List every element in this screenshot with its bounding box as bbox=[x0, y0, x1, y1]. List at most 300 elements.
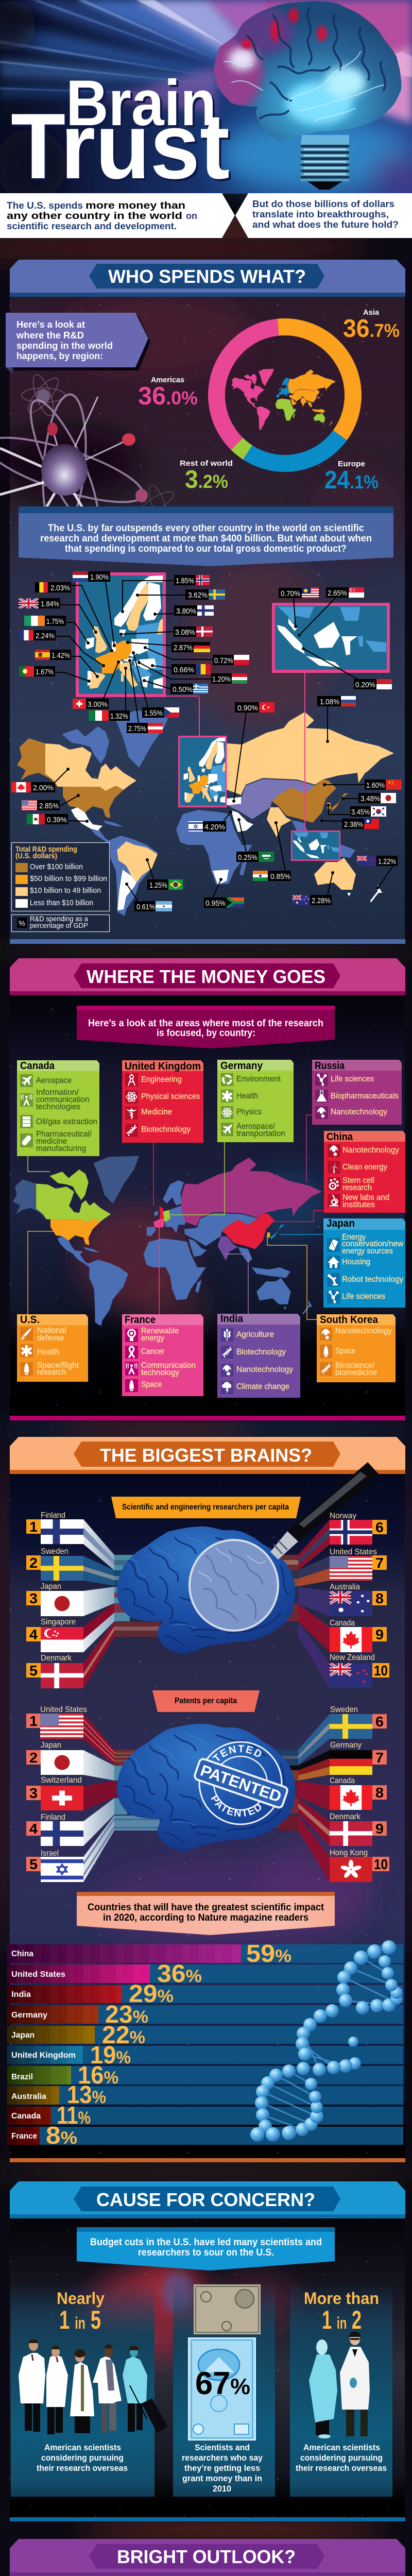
inset: Southeast Asia map bbox=[273, 604, 388, 671]
label: United Kingdom bbox=[19, 598, 60, 608]
section header: cause for concern: CAUSE FOR CONCERN? bbox=[96, 2189, 315, 2210]
card: South Korea: Nanotechnology bbox=[335, 1327, 392, 1335]
label: New Zealand: 1.22% bbox=[378, 857, 396, 866]
rank 10: New Zealand: New Zealand bbox=[330, 1653, 375, 1662]
card: France: energy bbox=[141, 1334, 164, 1343]
label: Japan: 3.48% bbox=[360, 794, 380, 803]
rank 1: United States: 1 bbox=[29, 1713, 38, 1729]
callout: budget cuts: Budget cuts in the U.S. have led many scientists and bbox=[90, 2237, 322, 2248]
rank 3: Japan: Japan bbox=[41, 1582, 61, 1591]
legend: total R&D spending: (U.S. dollars) bbox=[15, 852, 57, 860]
stat column: more than 1 in 2 bbox=[290, 2282, 392, 2497]
legend: total R&D spending: $50 billion to $99 billion bbox=[30, 874, 107, 883]
stat column: nearly 1 in 5: their research overseas bbox=[37, 2463, 128, 2473]
callout: research focus: Here’s a look at the areas where most of the research bbox=[88, 1018, 323, 1029]
callout: research focus: is focused, by country: bbox=[157, 1028, 255, 1039]
card: France: Cancer bbox=[141, 1347, 165, 1356]
card: France: Space bbox=[141, 1380, 162, 1389]
bar: India: 29% bbox=[129, 1980, 174, 2008]
stat column: 67 percent: researchers who say bbox=[182, 2453, 263, 2463]
card: United Kingdom bbox=[122, 1060, 203, 1143]
label: Turkey bbox=[235, 702, 274, 713]
illustration: brain with magnifier bbox=[117, 1462, 380, 1654]
label: patents per capita bbox=[152, 1690, 260, 1712]
bar: France: France bbox=[11, 2132, 37, 2141]
callout: R&D by region: happens, by region: bbox=[16, 351, 103, 361]
legend: total R&D spending: Less than $10 billion bbox=[30, 899, 93, 907]
label: Malaysia: 0.70% bbox=[281, 589, 300, 598]
illustration: DNA helix bbox=[250, 1940, 403, 2142]
rank flags: patents per capita bbox=[26, 1705, 389, 1882]
card: Japan bbox=[323, 1218, 405, 1308]
bar: Japan bbox=[7, 2022, 145, 2049]
rank 3: Switzerland bbox=[26, 1776, 83, 1810]
illustration: brain with patent stamp bbox=[116, 1724, 296, 1851]
card: China: Nanotechnology bbox=[342, 1146, 399, 1155]
bar: Australia bbox=[7, 2081, 106, 2109]
label: Brazil bbox=[147, 879, 183, 890]
rank 1: United States: United States bbox=[40, 1705, 87, 1714]
label: Ireland bbox=[24, 616, 66, 626]
stat column: nearly 1 in 5: considering pursuing bbox=[41, 2453, 124, 2463]
world map: research focus by country bbox=[13, 1156, 322, 1326]
small inset: Southeast Asia on world map bbox=[291, 831, 340, 860]
callout: scientific impact 2020: Countries that will have the greatest scientific impact bbox=[88, 1902, 324, 1913]
rank 9: Denmark: 9 bbox=[375, 1821, 384, 1837]
callout: U.S. outspends bbox=[19, 506, 393, 566]
rank 8: Canada bbox=[330, 1776, 387, 1810]
label: China bbox=[365, 779, 402, 790]
label: Israel: 4.20% bbox=[204, 823, 225, 832]
panel: where the money goes bbox=[10, 995, 405, 1416]
label: Australia bbox=[293, 895, 332, 905]
card: India: India bbox=[220, 1313, 244, 1325]
rank 6: Norway: 6 bbox=[375, 1519, 384, 1535]
rank 5: Israel: 5 bbox=[29, 1856, 38, 1872]
section header: cause for concern bbox=[10, 2181, 405, 2218]
rank 7: Germany: 7 bbox=[375, 1750, 384, 1766]
card: South Korea: Space bbox=[335, 1347, 355, 1355]
rank 3: Switzerland: Switzerland bbox=[41, 1776, 82, 1785]
card: Japan: Life sciences bbox=[342, 1292, 385, 1301]
legend: percent of GDP: % bbox=[19, 919, 25, 928]
label: South Africa: 0.95% bbox=[205, 899, 226, 908]
label: Italy bbox=[89, 710, 130, 721]
nebula strip under hero bbox=[222, 215, 248, 238]
rank 9: Canada: Canada bbox=[330, 1619, 355, 1628]
world map in donut bbox=[231, 369, 336, 430]
label: Russia: 1.08% bbox=[320, 698, 339, 706]
section header: where the money goes: WHERE THE MONEY GOES bbox=[87, 966, 325, 987]
bar: India bbox=[7, 1980, 174, 2008]
section header: bright outlook: BRIGHT OUTLOOK? bbox=[117, 2546, 296, 2567]
card: France bbox=[122, 1314, 203, 1396]
rank 10: New Zealand: 10 bbox=[374, 1663, 388, 1679]
card: South Korea: South Korea bbox=[320, 1314, 379, 1326]
callout: budget cuts bbox=[77, 2227, 335, 2270]
label: Argentina bbox=[134, 901, 172, 911]
label: Singapore bbox=[326, 587, 364, 598]
card: South Korea: biomedicine bbox=[335, 1368, 377, 1377]
label: Europe: 24.1% bbox=[324, 466, 379, 494]
rank 7: United States: United States bbox=[330, 1548, 377, 1556]
ribbons: patents left bbox=[83, 1714, 160, 1882]
label: Brazil: 1.25% bbox=[149, 881, 167, 890]
label: Rest of world: 3.2% bbox=[185, 466, 228, 494]
label: Finland bbox=[174, 605, 214, 616]
stat column: more than 1 in 2: considering pursuing bbox=[300, 2453, 383, 2463]
card: United Kingdom: United Kingdom bbox=[125, 1061, 201, 1072]
intro banner left: any other country in the world bbox=[7, 211, 182, 222]
stat column: nearly 1 in 5 bbox=[11, 2282, 167, 2497]
section header: where the money goes bbox=[10, 958, 405, 995]
bar: France: 8% bbox=[46, 2122, 77, 2149]
bar: United States: 36% bbox=[157, 1960, 202, 1988]
label: Israel bbox=[188, 821, 226, 832]
label: Belgium bbox=[35, 582, 71, 592]
label: South Africa bbox=[204, 897, 244, 908]
illustration: two scientists bbox=[309, 2332, 370, 2438]
bar: United Kingdom: United Kingdom bbox=[11, 2051, 76, 2060]
label: New Zealand bbox=[357, 856, 398, 866]
label: Russia bbox=[317, 696, 356, 706]
label: Turkey: 0.90% bbox=[237, 704, 258, 713]
label: Sweden: 3.62% bbox=[188, 591, 208, 600]
card: Japan: Housing bbox=[342, 1258, 370, 1266]
label: Finland: 3.80% bbox=[176, 607, 196, 616]
card: Japan: energy sources bbox=[342, 1247, 393, 1256]
intro banner left: scientific research and development. bbox=[7, 221, 177, 231]
rank 9: Denmark: Denmark bbox=[330, 1812, 361, 1821]
label: Portugal bbox=[19, 666, 55, 676]
stat column: 67 percent: Scientists and bbox=[195, 2443, 250, 2452]
panel: cause for concern bbox=[10, 2218, 405, 2517]
ribbons: researchers right bbox=[273, 1520, 330, 1688]
card: Russia: Nanotechnology bbox=[331, 1108, 387, 1116]
label: Hungary: 1.20% bbox=[212, 675, 231, 684]
callout: U.S. outspends: that spending is compared to our total gross domestic product? bbox=[65, 544, 347, 554]
card: Germany: Health bbox=[236, 1092, 258, 1100]
card: United Kingdom: Engineering bbox=[141, 1075, 182, 1084]
world map: R&D spending bbox=[17, 673, 394, 916]
stat column: 67 percent bbox=[173, 2282, 275, 2497]
bar: Brazil: Brazil bbox=[11, 2073, 33, 2081]
callout: research focus bbox=[77, 1006, 335, 1048]
intro banner left: The U.S. spends bbox=[7, 200, 83, 211]
label: Australia: 2.28% bbox=[312, 896, 331, 905]
label: South Korea bbox=[350, 806, 386, 817]
card: South Korea bbox=[317, 1314, 396, 1382]
bar: Australia: 13% bbox=[67, 2081, 106, 2109]
rank 6: Sweden bbox=[330, 1705, 387, 1739]
card: India: Agriculture bbox=[236, 1330, 274, 1339]
card: Russia: Life sciences bbox=[331, 1075, 374, 1083]
callout: R&D by region: spending in the world bbox=[16, 341, 113, 351]
intro banner right: But do those billions of dollars bbox=[252, 199, 394, 209]
icon: dollar bill front: 67% bbox=[195, 2366, 250, 2401]
card: Russia: Biopharmaceuticals bbox=[331, 1092, 399, 1100]
bar: Germany: Germany bbox=[11, 2011, 47, 2020]
rank 4: Singapore: 4 bbox=[29, 1626, 38, 1642]
label: Canada bbox=[11, 782, 55, 792]
stat column: nearly 1 in 5: 1 in 5 bbox=[59, 2306, 101, 2334]
label: Austria bbox=[127, 723, 163, 733]
rank 6: Sweden: Sweden bbox=[330, 1705, 358, 1714]
rank 2: Japan: 2 bbox=[29, 1750, 38, 1766]
label: Spain bbox=[35, 650, 71, 660]
label: Czech Republic bbox=[142, 707, 179, 718]
card: China: Stem cell bbox=[342, 1176, 374, 1185]
card: United Kingdom: Physical sciences bbox=[141, 1092, 200, 1101]
panel: the biggest brains bbox=[10, 1474, 405, 2158]
label: France bbox=[19, 630, 56, 640]
rank 10: New Zealand bbox=[330, 1653, 389, 1688]
card: Germany: Physics bbox=[236, 1108, 262, 1116]
card: Japan: Energy bbox=[342, 1233, 366, 1242]
label: Hungary bbox=[211, 673, 247, 684]
stat column: more than 1 in 2: More than bbox=[304, 2289, 379, 2308]
rank 10: Hong Kong: Hong Kong bbox=[330, 1849, 368, 1857]
rank 3: Switzerland: 3 bbox=[29, 1785, 38, 1801]
label: Mexico: 0.39% bbox=[47, 816, 67, 824]
card: U.S.: defense bbox=[37, 1334, 64, 1343]
rank 2: Japan bbox=[26, 1741, 83, 1775]
card: Canada: Oil/gas extraction bbox=[36, 1117, 97, 1126]
card: Germany: Environment bbox=[236, 1075, 281, 1083]
legend: percent of GDP bbox=[11, 914, 109, 931]
card: Germany: Germany bbox=[220, 1060, 263, 1072]
label: Malaysia bbox=[279, 588, 319, 598]
rank 3: Japan bbox=[26, 1582, 83, 1616]
bar: Canada bbox=[7, 2102, 91, 2129]
card: India: Nanotechnology bbox=[236, 1365, 293, 1374]
rank 8: Australia: Australia bbox=[330, 1583, 360, 1591]
label: Japan bbox=[358, 793, 396, 803]
callout: scientific impact 2020 bbox=[77, 1892, 335, 1935]
bar: Australia: Australia bbox=[11, 2092, 46, 2101]
label: Canada: 2.00% bbox=[33, 784, 54, 792]
card: Japan: Robot technology bbox=[342, 1275, 403, 1284]
stat column: 67 percent: they’re getting less bbox=[184, 2463, 260, 2473]
card: Canada: Aerospace bbox=[36, 1076, 72, 1085]
title: Trust bbox=[13, 96, 232, 200]
label: Americas: 36.0% bbox=[138, 382, 198, 410]
callout: scientific impact 2020: in 2020, according to Nature magazine readers bbox=[103, 1912, 308, 1923]
rank 8: Canada: Canada bbox=[330, 1776, 355, 1785]
card: Canada: Pharmaceutical/ bbox=[36, 1130, 92, 1139]
bar: Canada: Canada bbox=[11, 2112, 41, 2121]
label: Spain: 1.42% bbox=[52, 651, 70, 660]
bar: United Kingdom bbox=[7, 2042, 131, 2069]
label: Saudi Arabia bbox=[236, 852, 274, 862]
label: Rest of world bbox=[180, 459, 233, 494]
section header: who spends what: WHO SPENDS WHAT? bbox=[108, 266, 306, 287]
card: Russia bbox=[312, 1060, 402, 1125]
card: Canada: Information/ bbox=[36, 1088, 79, 1097]
callout: budget cuts: researchers to sour on the U.S. bbox=[138, 2247, 274, 2258]
rank 1: Finland: Finland bbox=[41, 1511, 65, 1520]
card: Canada: manufacturing bbox=[36, 1144, 86, 1153]
card: Germany bbox=[217, 1060, 294, 1142]
stat column: more than 1 in 2: American scientists bbox=[303, 2443, 380, 2452]
section header: bright outlook bbox=[10, 2539, 405, 2576]
rank 4: Finland bbox=[26, 1813, 83, 1846]
rank 2: Sweden: Sweden bbox=[41, 1547, 68, 1556]
intro banner right: translate into breakthroughs, bbox=[252, 209, 389, 219]
label: Indonesia: 0.20% bbox=[355, 681, 375, 689]
hero brain light bulb bbox=[201, 0, 404, 190]
label: South Korea: 3.45% bbox=[351, 808, 370, 817]
label: Taiwan bbox=[342, 819, 379, 829]
label: Switzerland bbox=[73, 699, 109, 709]
panel: bright outlook bbox=[10, 2566, 405, 2576]
label: Asia: Asia bbox=[363, 308, 380, 317]
card: Canada bbox=[17, 1060, 99, 1156]
label: Americas: Americas bbox=[151, 376, 184, 384]
label: Indonesia bbox=[354, 679, 392, 689]
label: Netherlands: 1.90% bbox=[90, 573, 109, 582]
intro banner right bbox=[235, 193, 412, 238]
rank 8: Australia bbox=[330, 1583, 387, 1616]
bar: United States: United States bbox=[11, 1970, 65, 1979]
label: Austria: 2.75% bbox=[128, 724, 146, 733]
label: Norway bbox=[174, 575, 210, 585]
card: France: technology bbox=[141, 1368, 179, 1377]
label: China: 1.60% bbox=[366, 781, 385, 790]
stat column: 67 percent: 2010 bbox=[213, 2484, 231, 2494]
bar: China: 59% bbox=[246, 1940, 291, 1968]
card: U.S.: U.S. bbox=[20, 1314, 40, 1326]
label: United Kingdom: 1.84% bbox=[41, 600, 59, 608]
legend: total R&D spending: Total R&D spending bbox=[15, 845, 77, 854]
card: Canada: communication bbox=[36, 1095, 90, 1104]
card: France: France bbox=[125, 1314, 156, 1326]
rank 8: Canada: 8 bbox=[375, 1785, 384, 1801]
bar: Japan: 22% bbox=[102, 2022, 145, 2049]
bar chart: scientific impact bbox=[7, 1940, 403, 2149]
rank 2: Japan: Japan bbox=[41, 1741, 61, 1750]
rank 2: Sweden: 2 bbox=[29, 1555, 38, 1571]
bar: India: India bbox=[11, 1990, 31, 1999]
label: Belgium: 2.03% bbox=[50, 584, 70, 592]
bar: Canada: 11% bbox=[57, 2102, 91, 2129]
card: China bbox=[324, 1131, 405, 1213]
label: Germany: 2.87% bbox=[174, 643, 193, 652]
label: United States: 2.85% bbox=[39, 802, 59, 810]
bar: China: China bbox=[11, 1950, 33, 1958]
icon: dollar bill back bbox=[194, 2284, 261, 2334]
card: France: Renewable bbox=[141, 1327, 179, 1335]
callout: R&D by region: where the R&D bbox=[16, 330, 84, 341]
ribbons: researchers left bbox=[83, 1519, 160, 1688]
card: Germany: transportation bbox=[236, 1129, 285, 1138]
section header: the biggest brains: THE BIGGEST BRAINS? bbox=[100, 1445, 312, 1466]
legend: total R&D spending: Over $100 billion bbox=[30, 862, 83, 871]
rank 9: Canada bbox=[330, 1619, 387, 1652]
label: Asia: 36.7% bbox=[343, 315, 400, 343]
small inset: Europe on world map bbox=[179, 737, 226, 806]
intro banner right: and what does the future hold? bbox=[252, 219, 399, 230]
connector lines bbox=[28, 1115, 324, 1319]
label: Denmark bbox=[174, 626, 213, 637]
label: Switzerland: 3.00% bbox=[88, 700, 108, 709]
rank 3: Japan: 3 bbox=[29, 1590, 38, 1606]
card: China: Clean energy bbox=[342, 1163, 387, 1172]
card: India bbox=[217, 1313, 300, 1398]
callout: R&D by region: Here’s a look at bbox=[16, 319, 85, 330]
rank 1: United States bbox=[26, 1705, 87, 1739]
bar: United States bbox=[7, 1960, 202, 1988]
illustration: five scientists bbox=[19, 2339, 167, 2434]
rank 2: Sweden bbox=[26, 1547, 83, 1581]
card: India: Climate change bbox=[236, 1382, 289, 1391]
label: Czech Republic: 1.55% bbox=[144, 709, 163, 718]
label: Saudi Arabia: 0.25% bbox=[238, 853, 258, 862]
card: Canada: Canada bbox=[20, 1060, 55, 1072]
card: United Kingdom: Medicine bbox=[141, 1108, 172, 1116]
rank 5: Israel: Israel bbox=[41, 1849, 59, 1858]
bar: Germany: 23% bbox=[105, 2001, 148, 2028]
rank 6: Sweden: 6 bbox=[375, 1714, 384, 1730]
card: U.S.: National bbox=[37, 1326, 66, 1335]
icon: patented stamp: PATENTED bbox=[211, 1795, 261, 1817]
rank 10: Hong Kong: 10 bbox=[374, 1856, 388, 1872]
callout: U.S. outspends: research and development at more than $400 billion. But what about when bbox=[40, 533, 372, 544]
label: India bbox=[253, 871, 291, 881]
intro banner left bbox=[0, 193, 235, 238]
rank 7: Germany: Germany bbox=[330, 1741, 362, 1750]
card: China: institutes bbox=[342, 1200, 375, 1209]
section header: who spends what bbox=[10, 260, 405, 297]
label: Argentina: 0.61% bbox=[136, 903, 155, 911]
label: Ireland: 1.75% bbox=[46, 617, 64, 626]
card: China: China bbox=[327, 1131, 353, 1143]
label: Greece: 0.50% bbox=[173, 685, 193, 694]
card: United Kingdom: Biotechnology bbox=[141, 1125, 191, 1134]
stat column: 67 percent: grant money than in bbox=[182, 2473, 262, 2483]
label: Europe: Europe bbox=[338, 460, 365, 468]
card: Russia: Russia bbox=[315, 1060, 345, 1072]
label: Portugal: 1.67% bbox=[36, 668, 54, 676]
callout: U.S. outspends: The U.S. by far outspends every other country in the world on scientific bbox=[48, 523, 364, 534]
rank 7: United States bbox=[330, 1548, 387, 1581]
label: researchers per capita bbox=[111, 1497, 301, 1518]
label: patents per capita: Patents per capita bbox=[175, 1697, 237, 1705]
rank 10: Hong Kong bbox=[330, 1849, 389, 1882]
card: South Korea: Bioscience/ bbox=[335, 1361, 375, 1370]
GDP labels with flags bbox=[11, 571, 402, 911]
bar: Brazil bbox=[7, 2062, 118, 2089]
label: Germany bbox=[171, 642, 210, 652]
rank 6: Norway bbox=[330, 1512, 387, 1545]
intro banner left: more money than bbox=[85, 200, 185, 211]
bar: Japan: Japan bbox=[11, 2031, 35, 2040]
stat column: more than 1 in 2: 1 in 2 bbox=[322, 2306, 362, 2334]
inset: Europe map bbox=[77, 574, 164, 696]
illustration: atoms bbox=[0, 372, 176, 535]
title: Brain bbox=[66, 67, 216, 139]
card: China: New labs and bbox=[342, 1193, 389, 1202]
intro banner left: on bbox=[186, 211, 197, 221]
panel: who spends what bbox=[0, 294, 405, 939]
stat column: more than 1 in 2: their research overseas bbox=[296, 2463, 387, 2473]
rank 1: Finland: 1 bbox=[29, 1519, 38, 1535]
rank 4: Finland: Finland bbox=[41, 1813, 65, 1822]
rank 5: Denmark bbox=[26, 1654, 83, 1688]
rank 4: Singapore: Singapore bbox=[41, 1618, 76, 1626]
donut chart: regional shares bbox=[217, 327, 353, 464]
label: Norway: 1.85% bbox=[176, 577, 194, 585]
